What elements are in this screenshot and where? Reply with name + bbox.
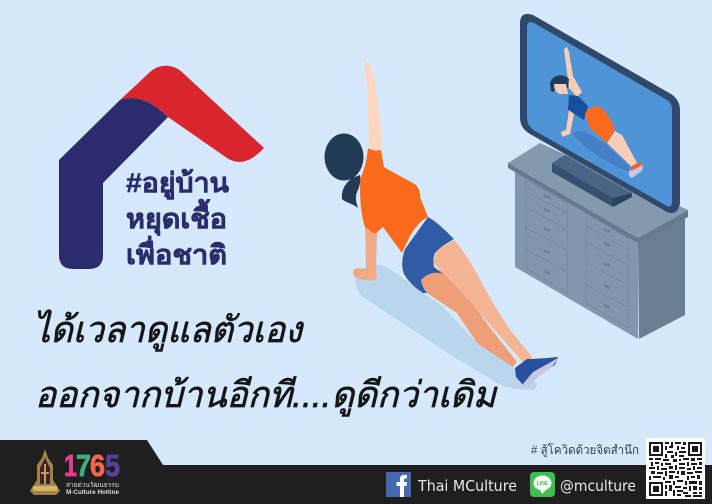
icon: facebook [386, 472, 411, 497]
hashtag caption: # สู้โควิดด้วยจิตสำนึก [531, 443, 639, 458]
facebook name: Thai MCulture [417, 477, 517, 495]
headline text: ออกจากบ้านอีกที....ดูดีกว่าเดิม [35, 374, 498, 417]
icon: line [530, 472, 555, 497]
headline text [33, 309, 498, 417]
logo: 1765 hotline: 5 [105, 448, 120, 483]
shoes [515, 357, 558, 386]
shirt [360, 148, 428, 253]
floor shadow [355, 265, 537, 390]
tv screen [527, 22, 672, 206]
ponytail [342, 175, 360, 208]
supporting arm [353, 226, 377, 280]
logo: 1765 hotline: 1 [64, 448, 77, 483]
logo: 1765 hotline: M-Culture Hotline [66, 490, 120, 496]
raised arm [363, 58, 381, 152]
illustration: television on cabinet [508, 14, 688, 339]
logo: 1765 hotline: 6 [90, 448, 105, 483]
icon: temple emblem [30, 449, 60, 495]
headline text: ได้เวลาดูแลตัวเอง [33, 309, 304, 352]
illustration: woman doing side plank [324, 58, 558, 390]
woman on tv [550, 47, 643, 178]
tv stand [552, 155, 632, 207]
logo hashtag text: เพื่อชาติ [126, 235, 227, 270]
logo: house campaign mark [59, 66, 264, 270]
line account: @mculture [560, 477, 636, 495]
tv frame [520, 14, 680, 213]
qr code [646, 438, 705, 499]
logo: 1765 hotline [64, 448, 120, 496]
front leg [433, 240, 533, 362]
shorts [402, 217, 454, 293]
logo: 1765 hotline: สายด่วนวัฒนธรรม [66, 481, 119, 489]
logo hashtag text [126, 168, 230, 270]
cabinet [508, 143, 688, 339]
logo hashtag text: #อยู่บ้าน [126, 168, 230, 200]
back leg [420, 270, 517, 367]
hair [324, 134, 364, 180]
footer bar [0, 440, 712, 504]
icon: line: LINE [537, 481, 549, 487]
logo: 1765 hotline: 7 [76, 448, 91, 483]
logo hashtag text: หยุดเชื้อ [126, 198, 227, 236]
